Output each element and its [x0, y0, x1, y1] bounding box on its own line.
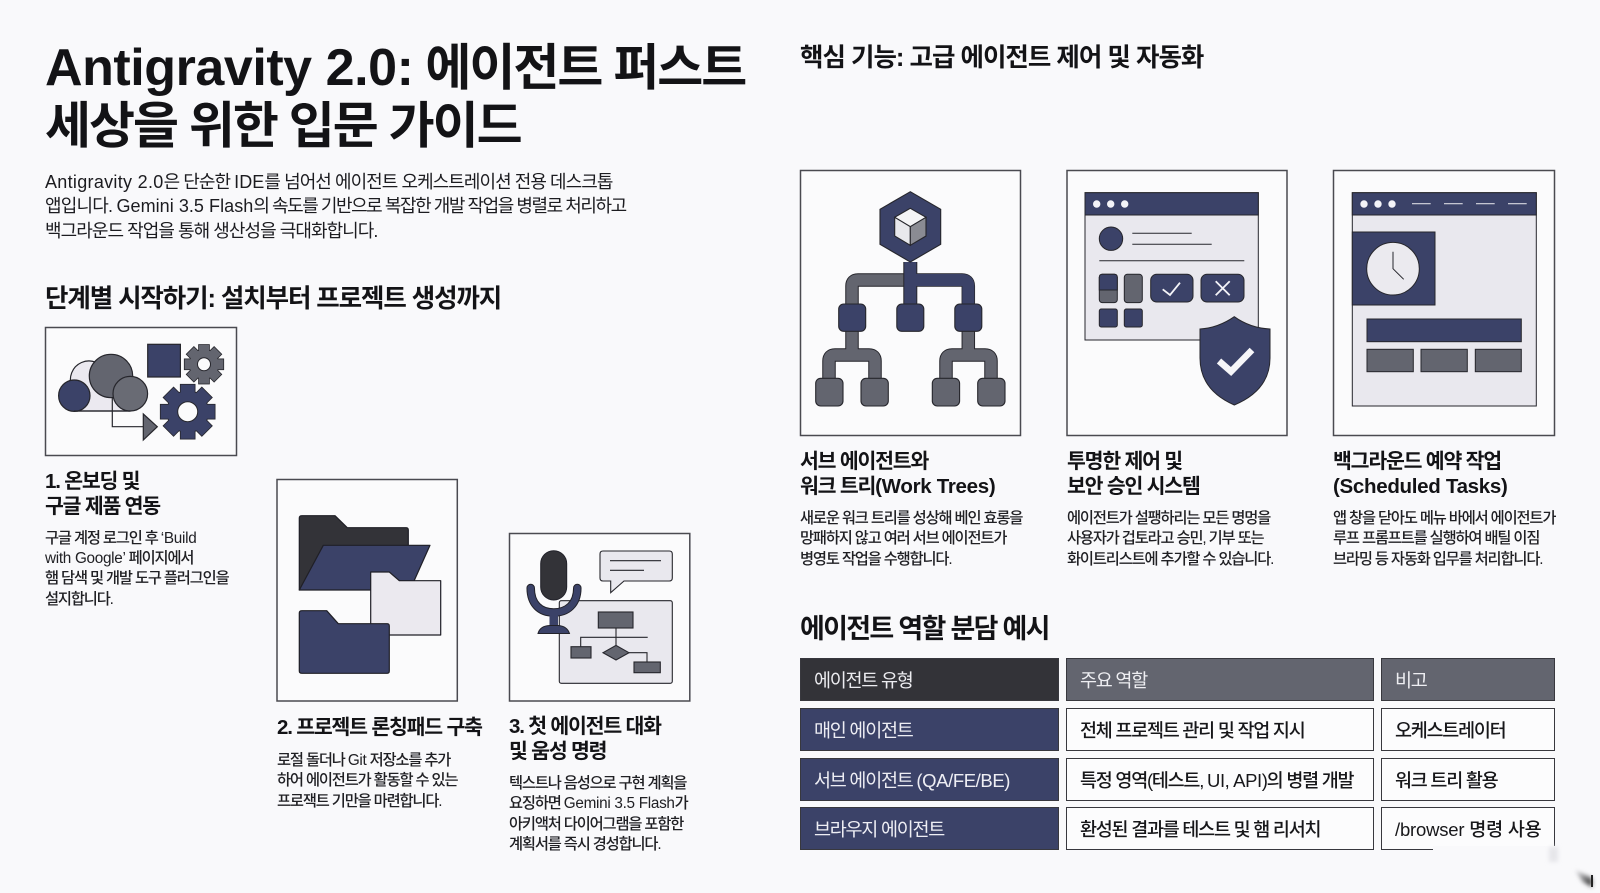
step 1 description: 설지합니다.: [45, 591, 113, 608]
step 2 description: 하어 에이전트가 활동할 수 있는: [277, 772, 457, 789]
icon: microphone, chat bubble and flowchart: [508, 532, 691, 702]
table header: note: [1381, 658, 1555, 701]
step 1 description: 구글 계정 로그인 후 ‘Build: [45, 530, 196, 546]
icon: onboarding cloud and gears: [44, 326, 238, 456]
heading: getting started: 단계별 시작하기: 설치부터 프로젝트 생성까지: [45, 285, 501, 313]
feature heading: [1333, 450, 1508, 498]
feature description: 에이전트가 설팽하리는 모든 명멍을: [1067, 510, 1270, 527]
icon: project folders: [276, 478, 458, 702]
table: agent roles: [800, 658, 1555, 850]
main agent role: [1066, 708, 1374, 751]
sub agent role: [1066, 758, 1374, 801]
shield: [1200, 317, 1270, 405]
step 3 description: 요징하면 Gemini 3.5 Flash가: [509, 795, 688, 812]
step 1 description: 햄 담색 및 개발 도구 플러그인을: [45, 570, 229, 587]
feature heading: [800, 450, 995, 498]
feature heading: 워크 트리(Work Trees): [800, 475, 995, 498]
row: sub agent: 서브 에이전트 (QA/FE/BE): [814, 770, 1010, 791]
feature description: [1067, 510, 1273, 568]
row: main agent: 매인 에이전트: [814, 720, 913, 741]
row: browser agent: [800, 807, 1059, 850]
step 2 heading: 2. 프로젝트 론칭패드 구축: [277, 716, 482, 739]
small gear: [185, 345, 223, 384]
step 3 description: 텍스트나 음성으로 구현 계획을: [509, 775, 686, 792]
feature description: 브라밍 등 자동화 입무를 처리합니다.: [1333, 551, 1542, 568]
step 2 panel: [276, 478, 482, 810]
browser agent role: [1066, 807, 1374, 850]
table header: role: 주요 역할: [1080, 670, 1147, 691]
feature heading: 서브 에이전트와: [800, 450, 928, 472]
feature heading: 투명한 제어 및: [1067, 450, 1182, 472]
step 2 description: 로절 돌더나 Git 저장소를 추가: [277, 752, 450, 769]
table header: type: [800, 658, 1059, 701]
icon: work tree: [800, 170, 1022, 436]
heading: core features: 핵심 기능: 고급 에이전트 제어 및 자동화: [800, 44, 1203, 72]
row: browser agent: 브라우지 에이전트: [814, 819, 944, 840]
row: sub agent: [800, 758, 1059, 801]
large gear: [161, 385, 215, 439]
feature description: [800, 510, 1023, 568]
title: 세상을 위한 입문 가이드: [45, 98, 521, 154]
browser agent note: [1381, 807, 1555, 850]
intro text: [45, 172, 626, 240]
step 3 description: 아키액처 다이어그램을 포함한: [509, 816, 683, 833]
heading: agent roles: 에이전트 역할 분담 예시: [800, 614, 1049, 644]
feature heading: (Scheduled Tasks): [1333, 475, 1508, 498]
feature panel: sub agents: [800, 170, 1023, 568]
feature description: 망패하지 않고 여러 서브 에이전트가: [800, 530, 1006, 547]
feature heading: 보안 승인 시스템: [1067, 475, 1200, 498]
browser agent note: /browser 명령 사용: [1395, 819, 1542, 840]
icon: window with security shield: [1066, 170, 1288, 436]
feature heading: 백그라운드 예약 작업: [1333, 450, 1501, 472]
title: Antigravity 2.0: 에이전트 퍼스트: [45, 39, 745, 97]
step 1 description: [45, 530, 229, 608]
sub agent note: [1381, 758, 1555, 801]
step 3 heading: 및 움성 명령: [509, 740, 606, 762]
step 3 description: [509, 775, 688, 853]
feature panel: approval system: [1066, 170, 1288, 568]
feature description: [1333, 510, 1556, 568]
microphone: [531, 551, 577, 634]
table header: role: [1066, 658, 1374, 701]
feature description: 화이트리스트에 추가할 수 있습니다.: [1067, 551, 1273, 568]
sub agent role: 특정 영역(테스트, UI, API)의 병렬 개발: [1080, 770, 1353, 791]
sub agent note: 워크 트리 활용: [1395, 770, 1497, 791]
step 3 panel: [508, 532, 691, 853]
main agent role: 전체 프로젝트 관리 및 작업 지시: [1080, 720, 1304, 741]
feature description: 사용자가 겁토라고 승민, 기부 또는: [1067, 530, 1263, 547]
browser agent role: 환성된 결과를 테스트 및 햄 리서치: [1080, 819, 1320, 840]
feature panel: scheduled tasks: [1332, 170, 1556, 568]
step 1 heading: 1. 온보딩 및: [45, 470, 139, 492]
step 3 heading: 3. 첫 에이전트 대화: [509, 715, 661, 738]
intro text: 백그라운드 작업을 통해 생산성을 극대화합니다.: [45, 220, 377, 240]
feature description: 앱 창을 닫아도 메뉴 바에서 에이전트가: [1333, 510, 1555, 527]
title: [45, 39, 746, 154]
table header: type: 에이전트 유형: [814, 670, 913, 691]
step 2 description: 프로잭트 기만을 마련합니다.: [277, 793, 441, 810]
step 3 heading: [509, 715, 662, 762]
step 1 panel: [44, 326, 238, 608]
intro text: Antigravity 2.0은 단순한 IDE를 넘어선 에이전트 오케스트레이션 전용 데스크톱: [45, 172, 612, 192]
row: main agent: [800, 708, 1059, 751]
icon: scheduled window with clock: [1332, 170, 1556, 436]
feature description: 루프 프롬프트를 실행하여 배틸 이짐: [1333, 530, 1539, 547]
feature heading: [1067, 450, 1200, 498]
main agent note: 오케스트레이터: [1395, 720, 1505, 741]
feature description: 새로운 워크 트리를 성상해 베인 효롱을: [800, 510, 1022, 527]
table header: note: 비고: [1395, 670, 1427, 691]
feature description: 병영토 작업을 수행합니다.: [800, 551, 951, 568]
step 3 description: 계획서를 즉시 경성합니다.: [509, 836, 660, 853]
step 1 description: with Google’ 페이지에서: [45, 550, 193, 567]
step 1 heading: [45, 470, 160, 518]
step 1 heading: 구글 제품 연동: [45, 495, 160, 518]
step 2 description: [277, 752, 458, 810]
intro text: 앱입니다. Gemini 3.5 Flash의 속도를 기반으로 복잡한 개발 작업을 병렬로 처리하고: [45, 196, 626, 216]
main agent note: [1381, 708, 1555, 751]
